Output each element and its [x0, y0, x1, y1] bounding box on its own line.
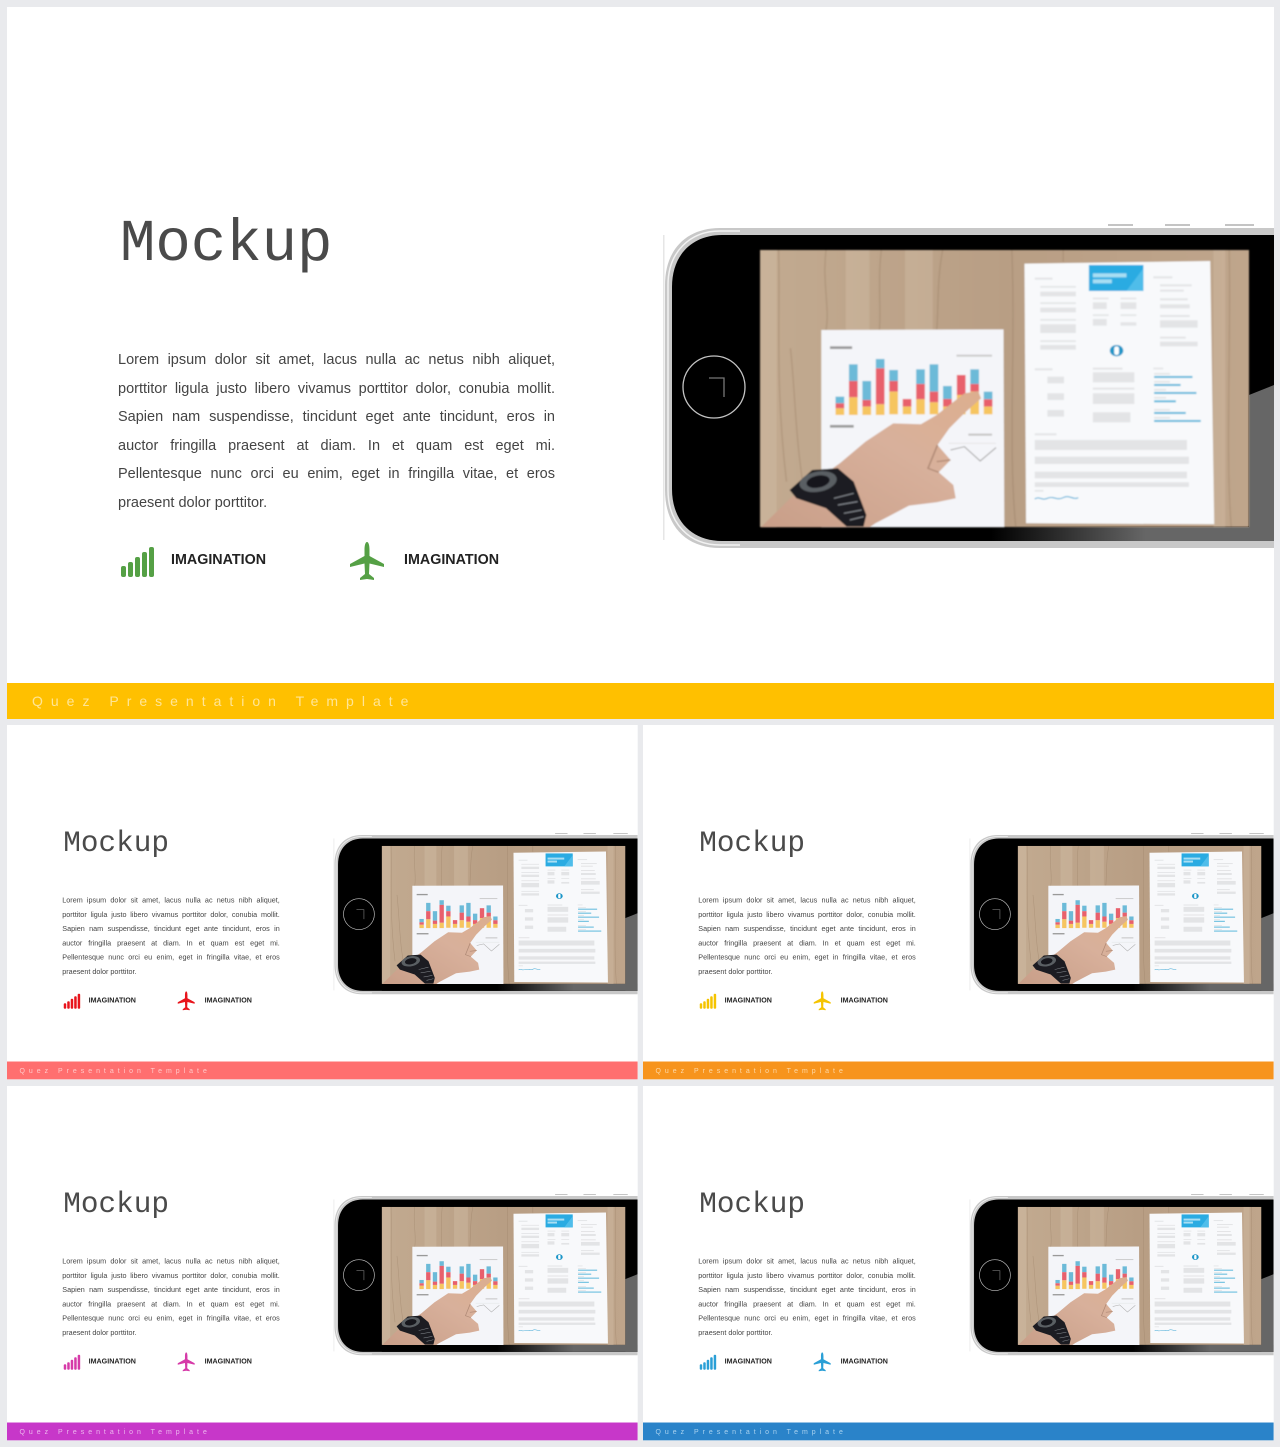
body text: porttitor ligula justo libero vivamus porttitor dolor, conubia mollit.	[62, 911, 280, 919]
body text: auctor fringilla praesent at diam. In et quam est eget mi.	[62, 1300, 280, 1308]
footer bar: Quez Presentation Template	[32, 693, 416, 709]
body text	[698, 897, 916, 976]
body text: praesent dolor porttitor.	[698, 1329, 772, 1337]
body text: Lorem ipsum dolor sit amet, lacus nulla ac netus nibh aliquet,	[62, 1258, 280, 1266]
footer bar: Quez Presentation Template	[655, 1066, 847, 1074]
title: Mockup	[699, 827, 805, 860]
body text	[62, 1258, 280, 1337]
icon: airplane	[178, 1352, 195, 1372]
label: imagination 1: IMAGINATION	[171, 552, 266, 568]
label: imagination 1: IMAGINATION	[725, 1357, 772, 1365]
signature	[1035, 497, 1078, 499]
slide: small purple	[7, 1086, 638, 1440]
body text: Sapien nam suspendisse, tincidunt eget ante tincidunt, eros in	[698, 925, 916, 933]
wood grain	[779, 250, 1231, 527]
body text: Sapien nam suspendisse, tincidunt eget ante tincidunt, eros in	[698, 1286, 916, 1294]
body text: porttitor ligula justo libero vivamus porttitor dolor, conubia mollit.	[62, 1272, 280, 1280]
slide: large yellow	[7, 7, 1274, 719]
footer bar	[643, 1062, 1274, 1079]
icon: signal bars	[700, 1354, 716, 1370]
label: imagination 2: IMAGINATION	[404, 552, 499, 568]
label: imagination 1: IMAGINATION	[725, 996, 772, 1004]
footer bar	[7, 1423, 638, 1440]
body text: auctor fringilla praesent at diam. In et quam est eget mi.	[118, 438, 555, 454]
phone mockup	[663, 224, 1274, 548]
line chart	[949, 443, 996, 461]
body text: auctor fringilla praesent at diam. In et quam est eget mi.	[698, 1300, 916, 1308]
body text	[118, 352, 555, 511]
slide: small coral	[7, 725, 638, 1079]
side buttons	[1108, 224, 1254, 226]
body text: praesent dolor porttitor.	[118, 495, 267, 511]
title: Mockup	[699, 1188, 805, 1221]
label: imagination 2: IMAGINATION	[205, 996, 252, 1004]
photo	[760, 250, 1249, 527]
body text: Sapien nam suspendisse, tincidunt eget ante tincidunt, eros in	[62, 925, 280, 933]
body text	[698, 1258, 916, 1337]
body text: praesent dolor porttitor.	[62, 968, 136, 976]
footer bar: Quez Presentation Template	[19, 1066, 211, 1074]
skill bars	[1154, 376, 1201, 422]
footer bar	[643, 1423, 1274, 1440]
phone mockup	[334, 833, 638, 994]
phone screen body	[672, 235, 1274, 541]
right paper	[1024, 261, 1214, 524]
body text: auctor fringilla praesent at diam. In et quam est eget mi.	[62, 939, 280, 947]
icon: airplane	[814, 991, 831, 1010]
left paper	[821, 329, 1004, 527]
phone mockup	[970, 1194, 1274, 1356]
body text: Pellentesque nunc orci eu enim, eget in fringilla vitae, et eros	[698, 1315, 916, 1323]
icon: airplane	[350, 542, 384, 580]
body text: Sapien nam suspendisse, tincidunt eget ante tincidunt, eros in	[118, 409, 555, 425]
label: imagination 2: IMAGINATION	[841, 996, 888, 1004]
resume text lines	[1035, 276, 1198, 492]
stacked bar chart	[836, 359, 992, 415]
body text: auctor fringilla praesent at diam. In et quam est eget mi.	[698, 939, 916, 947]
body text: Pellentesque nunc orci eu enim, eget in fringilla vitae, et eros	[698, 954, 916, 962]
icon: signal bars	[700, 994, 716, 1009]
slide: small orange	[643, 725, 1274, 1079]
body text: Lorem ipsum dolor sit amet, lacus nulla ac netus nibh aliquet,	[118, 352, 555, 368]
title: Mockup	[63, 827, 169, 860]
body text: porttitor ligula justo libero vivamus porttitor dolor, conubia mollit.	[698, 1272, 916, 1280]
hand	[761, 391, 981, 527]
phone frame	[665, 228, 1274, 548]
body text: praesent dolor porttitor.	[62, 1329, 136, 1337]
body text: Lorem ipsum dolor sit amet, lacus nulla ac netus nibh aliquet,	[62, 897, 280, 905]
phone mockup	[334, 1194, 638, 1356]
body text	[62, 897, 280, 976]
body text: Lorem ipsum dolor sit amet, lacus nulla ac netus nibh aliquet,	[698, 1258, 916, 1266]
title: Mockup	[120, 211, 332, 278]
label: imagination 2: IMAGINATION	[841, 1357, 888, 1365]
footer bar	[7, 1062, 638, 1079]
body text: porttitor ligula justo libero vivamus porttitor dolor, conubia mollit.	[698, 911, 916, 919]
body text: Sapien nam suspendisse, tincidunt eget ante tincidunt, eros in	[62, 1286, 280, 1294]
phone mockup	[970, 833, 1274, 994]
body text: porttitor ligula justo libero vivamus porttitor dolor, conubia mollit.	[118, 381, 555, 397]
icon: signal bars	[64, 1354, 80, 1370]
icon: signal bars	[121, 547, 154, 577]
slide: small blue	[643, 1086, 1274, 1440]
label: imagination 1: IMAGINATION	[89, 1357, 136, 1365]
icon: signal bars	[64, 994, 80, 1009]
title: Mockup	[63, 1188, 169, 1221]
footer bar: Quez Presentation Template	[655, 1427, 847, 1435]
wristwatch	[790, 468, 866, 527]
footer bar: Quez Presentation Template	[19, 1427, 211, 1435]
body text: praesent dolor porttitor.	[698, 968, 772, 976]
icon: airplane	[178, 991, 195, 1010]
body text: Pellentesque nunc orci eu enim, eget in fringilla vitae, et eros	[62, 1315, 280, 1323]
icon: airplane	[814, 1352, 831, 1372]
body text: Lorem ipsum dolor sit amet, lacus nulla ac netus nibh aliquet,	[698, 897, 916, 905]
label: imagination 1: IMAGINATION	[89, 996, 136, 1004]
label: imagination 2: IMAGINATION	[205, 1357, 252, 1365]
body text: Pellentesque nunc orci eu enim, eget in fringilla vitae, et eros	[118, 466, 555, 482]
footer bar	[7, 683, 1274, 719]
home button	[683, 356, 745, 418]
body text: Pellentesque nunc orci eu enim, eget in fringilla vitae, et eros	[62, 954, 280, 962]
